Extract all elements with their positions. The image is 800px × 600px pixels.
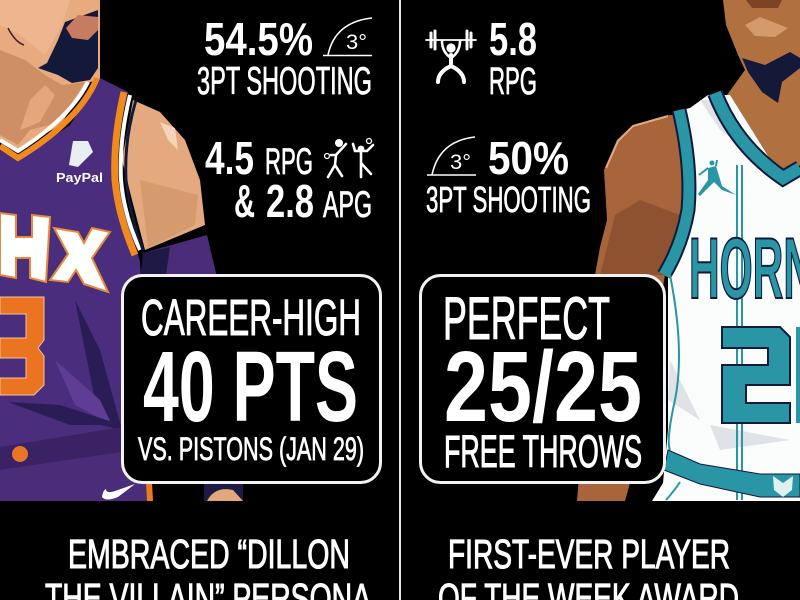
Jordan logo <box>698 160 736 196</box>
jersey armhole trim <box>115 92 143 255</box>
right player beard <box>742 52 800 103</box>
Suns logo <box>12 446 28 462</box>
stat: 54.5% 3PT shooting <box>197 13 372 103</box>
left player beard and lips <box>38 10 98 83</box>
callout: perfect 25/25 free throws <box>420 276 664 482</box>
heading: left caption <box>45 531 371 600</box>
hem orange trim <box>146 483 153 501</box>
jersey collar trim <box>0 78 97 158</box>
right jersey collar <box>715 93 800 178</box>
jersey number 3 <box>0 297 44 395</box>
divider line <box>399 0 401 600</box>
PayPal logo: PayPal <box>56 170 103 185</box>
icon: three-point arc: 3° <box>450 151 471 174</box>
callout: career-high 40 points: 40 PTS <box>143 331 358 443</box>
stat: 5.8 RPG: RPG <box>489 61 537 103</box>
icon: weightlifter <box>426 31 476 82</box>
callout: perfect 25/25 free throws: PERFECT <box>443 285 610 352</box>
stat: 5.8 RPG <box>426 13 537 103</box>
jersey side stripes <box>666 275 680 500</box>
Nike swoosh <box>102 484 135 500</box>
right player jersey <box>652 95 800 501</box>
heading: left caption: EMBRACED “DILLON <box>68 531 350 577</box>
callout: career-high 40 points <box>122 276 380 482</box>
icon: three-point arc <box>323 18 372 56</box>
icon: three-point arc: 3° <box>346 31 367 54</box>
callout: perfect 25/25 free throws: 25/25 <box>444 331 642 443</box>
stat: 4.5 RPG and 2.8 APG: & <box>234 175 255 227</box>
stat: 4.5 RPG and 2.8 APG <box>205 132 373 227</box>
jersey hem shorts <box>0 452 153 501</box>
icon: three-point arc <box>427 137 476 175</box>
heading: right caption <box>438 531 739 600</box>
arm sleeve <box>140 235 216 282</box>
callout: career-high 40 points: VS. PISTONS (JAN 29) <box>138 431 364 467</box>
stat: 4.5 RPG and 2.8 APG: APG <box>323 184 372 225</box>
right player face and neck <box>723 0 800 185</box>
stat: 50% 3PT shooting: 50% <box>488 132 569 184</box>
panel: right player illustration <box>577 0 800 501</box>
right player nose <box>746 0 782 8</box>
callout: career-high 40 points: CAREER-HIGH <box>141 289 361 346</box>
stat: 54.5% 3PT shooting: 54.5% <box>204 13 313 65</box>
callout: perfect 25/25 free throws: FREE THROWS <box>444 426 642 477</box>
stat: 5.8 RPG: 5.8 <box>489 13 537 65</box>
left player jersey <box>0 78 153 501</box>
stat: 4.5 RPG and 2.8 APG: 4.5 <box>205 132 254 184</box>
jersey sunburst decoration <box>75 300 122 430</box>
jersey number 21 <box>722 327 800 423</box>
jersey waistband <box>0 427 122 470</box>
stat: 50% 3PT shooting: 3PT SHOOTING <box>426 179 591 220</box>
right player shoulder <box>577 115 695 501</box>
icon: two players <box>324 138 373 177</box>
PayPal logo <box>56 141 103 185</box>
jersey centre stripes <box>737 165 742 500</box>
stat: 54.5% 3PT shooting: 3PT SHOOTING <box>197 60 372 103</box>
stat: 50% 3PT shooting <box>426 132 591 220</box>
right jersey armhole trim <box>664 110 689 275</box>
forearm <box>204 484 243 501</box>
panel: left player illustration <box>0 0 243 501</box>
left player shoulder <box>122 100 205 250</box>
stat: 4.5 RPG and 2.8 APG: 2.8 <box>266 175 314 227</box>
stat: 4.5 RPG and 2.8 APG: RPG <box>265 141 313 182</box>
jersey lettering HX <box>0 213 110 292</box>
left player skin: face and chest <box>0 0 100 150</box>
Hornets logo on waistband <box>773 476 793 497</box>
jersey waistband <box>664 450 800 497</box>
right player mouth <box>745 17 788 37</box>
